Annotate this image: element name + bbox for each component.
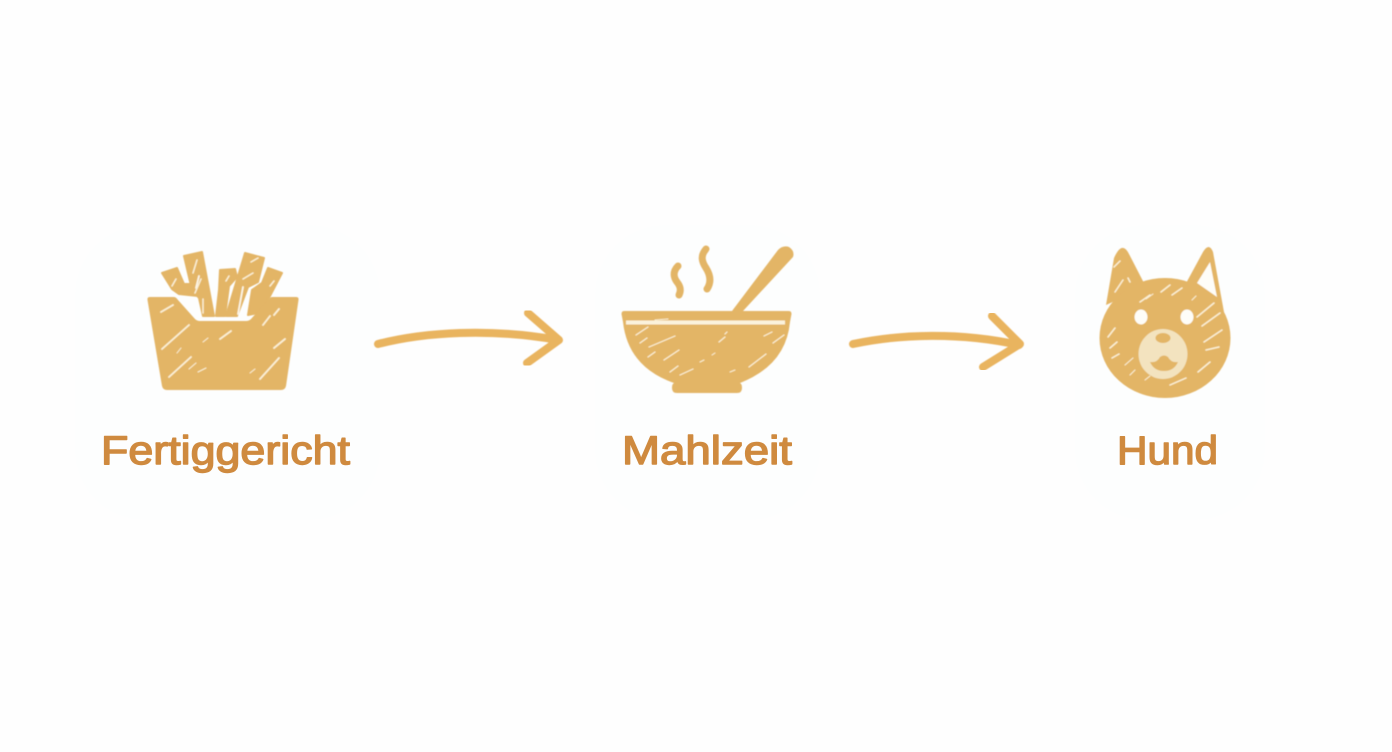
- spoon: [732, 246, 794, 311]
- fry gaps: [196, 276, 243, 314]
- box: [147, 297, 299, 390]
- icon: dog head: [1100, 247, 1230, 398]
- arrow: fries to bowl: [378, 313, 559, 363]
- steam: [674, 249, 710, 295]
- fries: [162, 252, 282, 316]
- arrow: bowl to dog: [853, 316, 1020, 367]
- mouth: [1150, 356, 1178, 371]
- label: Mahlzeit: Mahlzeit: [622, 429, 792, 473]
- ears: [1106, 248, 1146, 305]
- label: Fertiggericht: Fertiggericht: [101, 429, 350, 473]
- icon: fries box: [147, 252, 299, 390]
- icon: steaming bowl with spoon: [622, 246, 794, 393]
- eyes: [1134, 310, 1148, 324]
- label: Hund: Hund: [1117, 429, 1218, 473]
- muzzle: [1138, 329, 1188, 379]
- nose: [1156, 333, 1170, 343]
- hatching: [636, 319, 784, 375]
- head: [1100, 278, 1230, 398]
- bowl: [622, 311, 792, 393]
- rim highlight: [626, 320, 785, 324]
- hatching: [161, 258, 285, 379]
- inner ear: [1197, 262, 1217, 297]
- hatching: [1108, 261, 1222, 385]
